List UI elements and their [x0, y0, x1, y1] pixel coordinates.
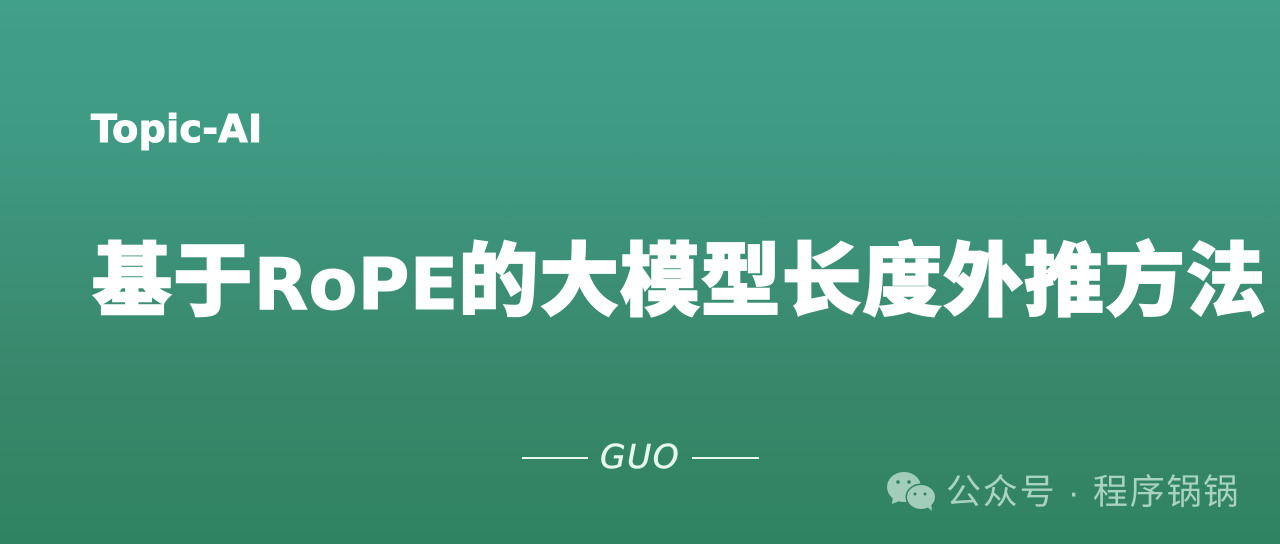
label: Topic-AI: Topic-AI	[91, 107, 262, 151]
right rule	[692, 457, 759, 459]
watermark text: 公众号 · 程序锅锅	[946, 473, 1240, 512]
left rule	[522, 457, 588, 459]
title: 基于RoPE的大模型长度外推方法	[92, 237, 1266, 326]
watermark	[887, 472, 1240, 512]
author name: GUO	[600, 437, 680, 476]
icon: wechat	[887, 472, 935, 511]
